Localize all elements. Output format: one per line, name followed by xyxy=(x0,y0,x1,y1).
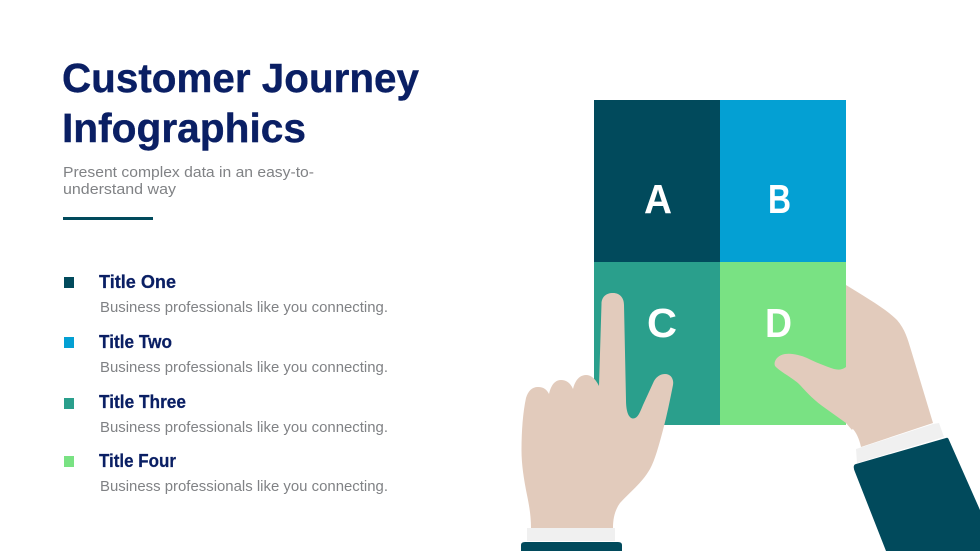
cell B xyxy=(720,100,846,262)
list item: title one: Title One xyxy=(99,272,176,292)
list item: title four: Business professionals like you connecting. xyxy=(100,478,388,495)
list item: title three xyxy=(64,392,388,436)
icon: left hand pointing xyxy=(521,293,673,551)
cell B: B xyxy=(768,176,791,222)
icon: right hand thumb over the card xyxy=(775,354,870,430)
list item: title one xyxy=(64,272,388,316)
list item: title two: Title Two xyxy=(99,332,172,352)
list item: title one: Business professionals like you connecting. xyxy=(100,299,388,316)
list item: title four xyxy=(64,451,388,495)
icon: right hand holding the card xyxy=(846,285,980,551)
cell C: C xyxy=(647,300,677,346)
subtitle: understand way xyxy=(63,181,177,198)
subtitle xyxy=(63,164,314,198)
title: Customer Journey xyxy=(62,55,419,101)
list item: title four: Title Four xyxy=(99,451,176,471)
sleeve xyxy=(521,542,622,551)
cell C xyxy=(594,262,720,425)
title xyxy=(62,55,419,151)
list item: title two xyxy=(64,332,388,376)
card grid xyxy=(594,100,846,425)
cell A: A xyxy=(644,176,672,222)
list item: title two: Business professionals like you connecting. xyxy=(100,359,388,376)
cell D xyxy=(720,262,846,425)
cell A xyxy=(594,100,720,262)
title underline xyxy=(63,217,153,220)
cell D: D xyxy=(765,300,792,346)
list item: title three: Title Three xyxy=(99,392,186,412)
title: Infographics xyxy=(62,105,306,151)
cuff xyxy=(527,528,615,541)
subtitle: Present complex data in an easy-to- xyxy=(63,164,314,181)
list item: title three: Business professionals like you connecting. xyxy=(100,419,388,436)
